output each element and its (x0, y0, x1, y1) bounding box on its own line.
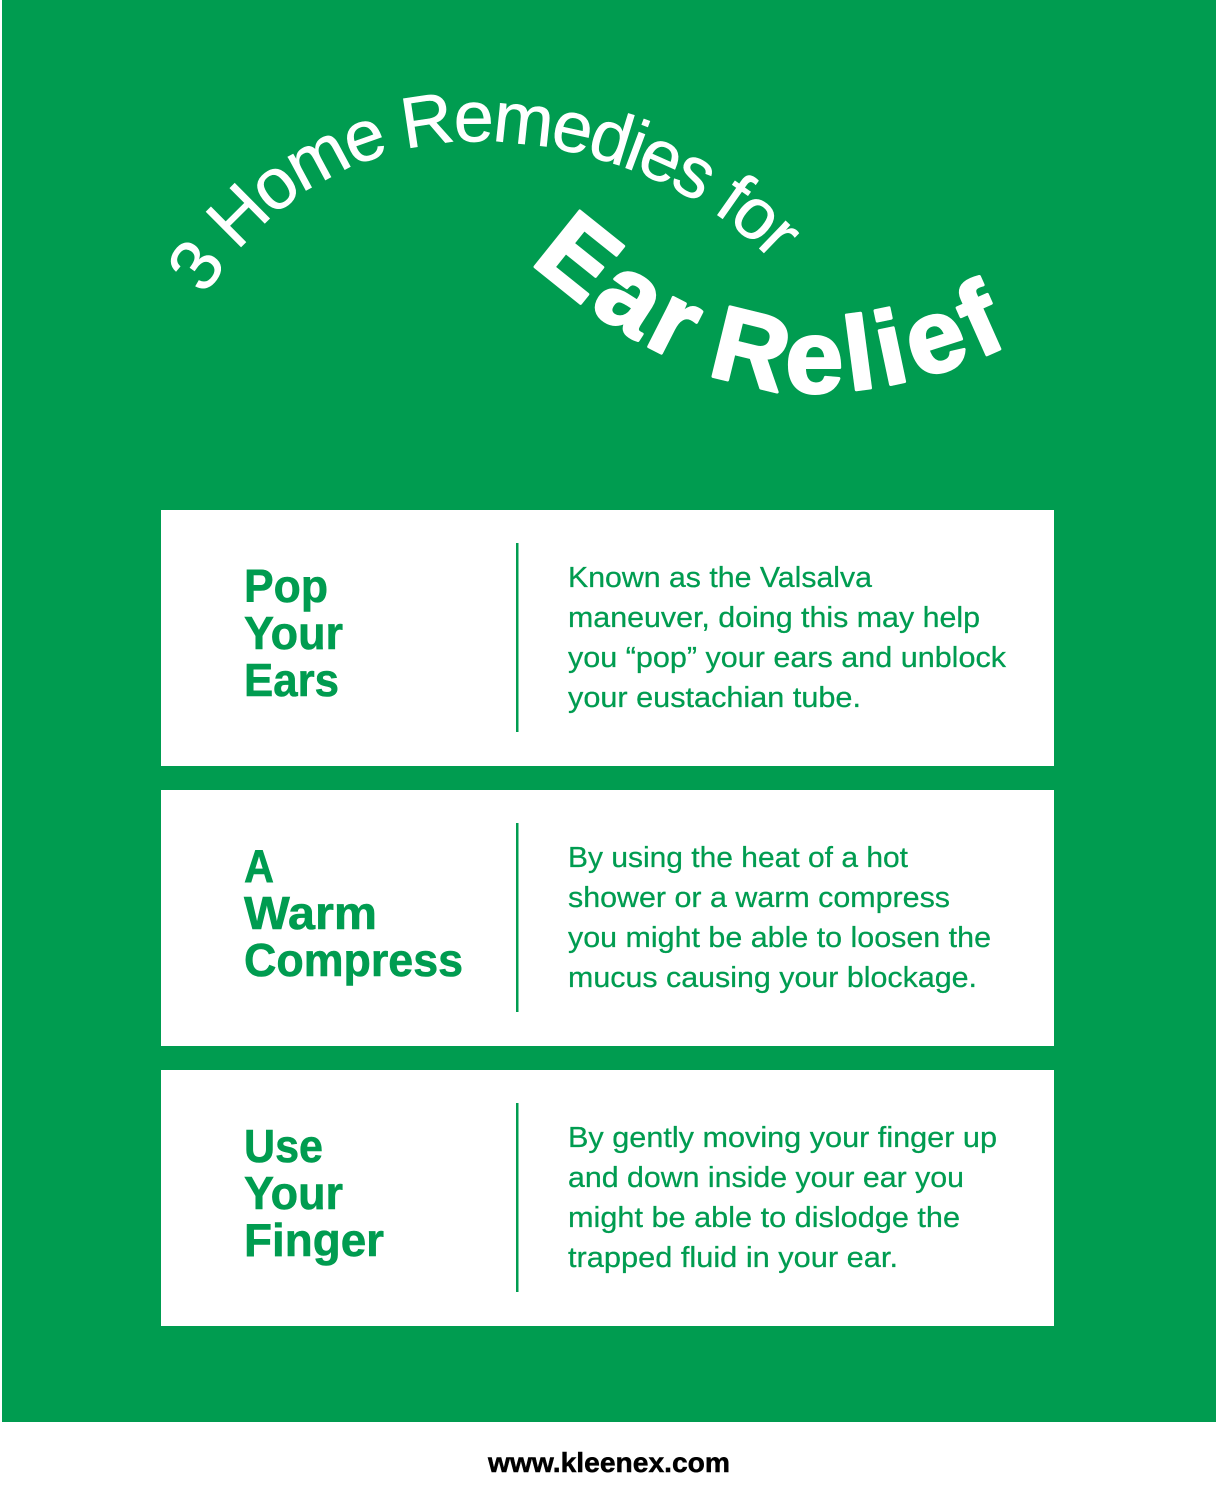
description: Use Your Finger: trapped fluid in your ear. (568, 1242, 898, 1274)
description: Use Your Finger: and down inside your ear you (568, 1162, 964, 1194)
title (170, 94, 1002, 395)
heading: Use Your Finger: Your (244, 1167, 343, 1219)
description: Pop Your Ears (568, 562, 1007, 714)
description: A Warm Compress: By using the heat of a hot (568, 842, 908, 874)
description: A Warm Compress: mucus causing your blockage. (568, 962, 977, 994)
description: Pop Your Ears: you “pop” your ears and unblock (568, 642, 1007, 674)
heading: Pop Your Ears: Pop (244, 560, 328, 612)
heading: Use Your Finger: Use (244, 1120, 323, 1172)
heading: A Warm Compress: Compress (244, 934, 463, 986)
heading: A Warm Compress (244, 840, 463, 986)
heading: Use Your Finger (244, 1120, 384, 1266)
title line: 3 Home Remedies for: 3 Home Remedies for (170, 94, 800, 288)
description: Use Your Finger: might be able to dislodge the (568, 1202, 960, 1234)
description: A Warm Compress: you might be able to loosen the (568, 922, 991, 954)
description: A Warm Compress (568, 842, 991, 994)
footer url: www.kleenex.com (487, 1447, 730, 1478)
heading: Pop Your Ears (244, 560, 343, 706)
title line: Ear Relief: Ear Relief (534, 209, 1002, 395)
heading: A Warm Compress: A (244, 840, 274, 892)
panel: Use Your Finger (161, 1070, 1054, 1326)
description: Pop Your Ears: maneuver, doing this may help (568, 602, 980, 634)
description: A Warm Compress: shower or a warm compress (568, 882, 950, 914)
heading: A Warm Compress: Warm (244, 887, 377, 939)
description: Use Your Finger: By gently moving your finger up (568, 1122, 997, 1154)
description: Pop Your Ears: Known as the Valsalva (568, 562, 873, 594)
description: Use Your Finger (568, 1122, 997, 1274)
heading: Pop Your Ears: Your (244, 607, 343, 659)
heading: Pop Your Ears: Ears (244, 654, 339, 706)
description: Pop Your Ears: your eustachian tube. (568, 682, 861, 714)
panel: Pop Your Ears (161, 510, 1054, 766)
heading: Use Your Finger: Finger (244, 1214, 384, 1266)
panel: A Warm Compress (161, 790, 1054, 1046)
